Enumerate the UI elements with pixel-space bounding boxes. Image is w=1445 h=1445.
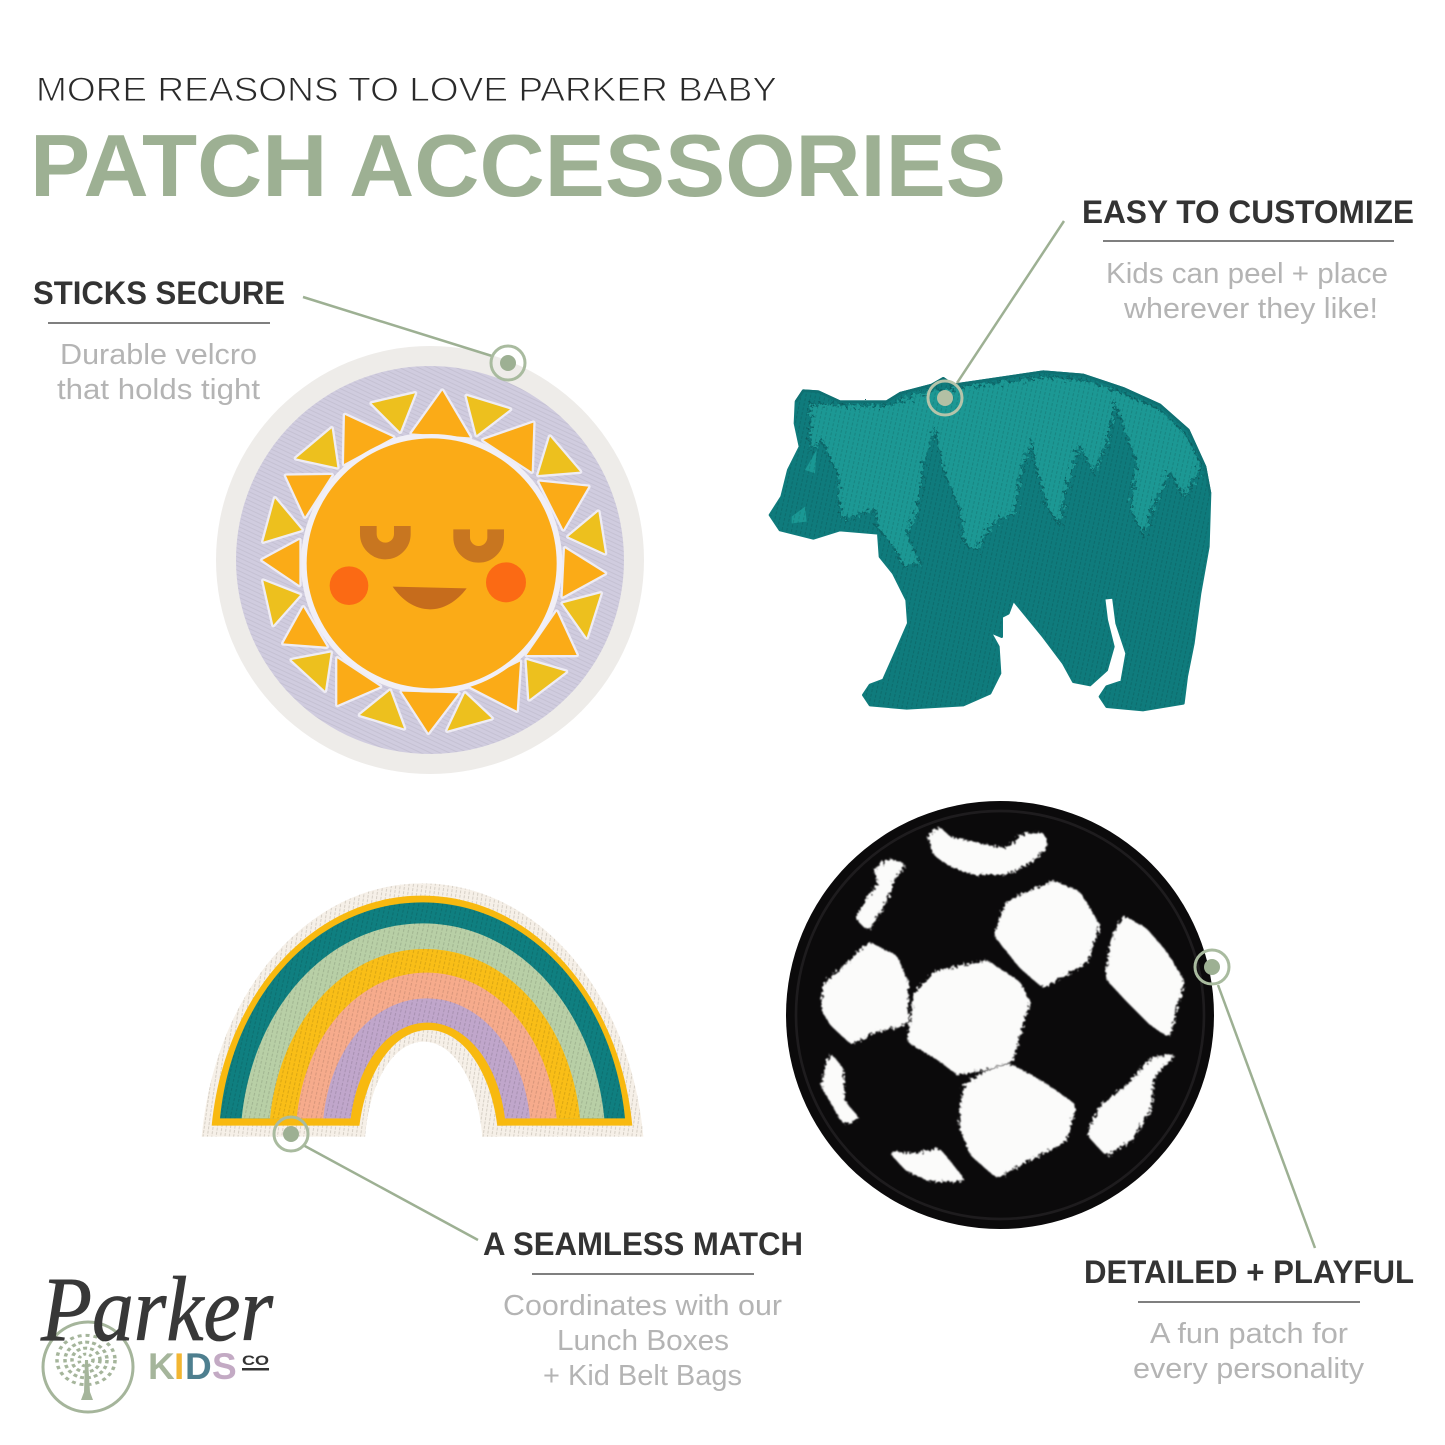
patch: rainbow [202, 883, 643, 1138]
subtitle: MORE REASONS TO LOVE PARKER BABY [36, 71, 777, 109]
callout: a seamless match [274, 1117, 803, 1392]
callout: sticks secure: STICKS SECURE [33, 275, 285, 311]
callout: detailed + playful: DETAILED + PLAYFUL [1084, 1254, 1414, 1290]
callout: easy to customize: EASY TO CUSTOMIZE [1082, 194, 1414, 230]
callout: sticks secure: Durable velcro [60, 339, 257, 371]
patch: soccer ball [786, 801, 1214, 1229]
callout: easy to customize: wherever they like! [1123, 293, 1378, 325]
callout: a seamless match: + Kid Belt Bags [543, 1360, 742, 1392]
callout: a seamless match: Coordinates with our [503, 1290, 782, 1322]
logo: Parker Kids Co: Parker [40, 1258, 274, 1360]
logo: Parker Kids Co: K [148, 1346, 175, 1387]
logo: Parker Kids Co: CO [242, 1352, 269, 1368]
logo: Parker Kids Co: D [185, 1346, 212, 1387]
callout: detailed + playful [1084, 950, 1414, 1385]
callout: detailed + playful: A fun patch for [1150, 1318, 1348, 1350]
logo: Parker Kids Co: S [212, 1346, 237, 1387]
callout: sticks secure: that holds tight [57, 374, 260, 406]
callout: a seamless match: A SEAMLESS MATCH [483, 1226, 803, 1262]
patch: bear [770, 372, 1210, 710]
patch: sun [216, 346, 644, 774]
title: PATCH ACCESSORIES [30, 116, 1006, 215]
callout: a seamless match: Lunch Boxes [557, 1325, 729, 1357]
callout: sticks secure [33, 275, 525, 406]
callout: detailed + playful: every personality [1133, 1353, 1365, 1385]
logo: Parker Kids Co: I [174, 1346, 184, 1387]
callout: easy to customize [928, 194, 1414, 415]
callout: easy to customize: Kids can peel + place [1106, 258, 1388, 290]
logo: Parker Kids Co [40, 1258, 274, 1412]
